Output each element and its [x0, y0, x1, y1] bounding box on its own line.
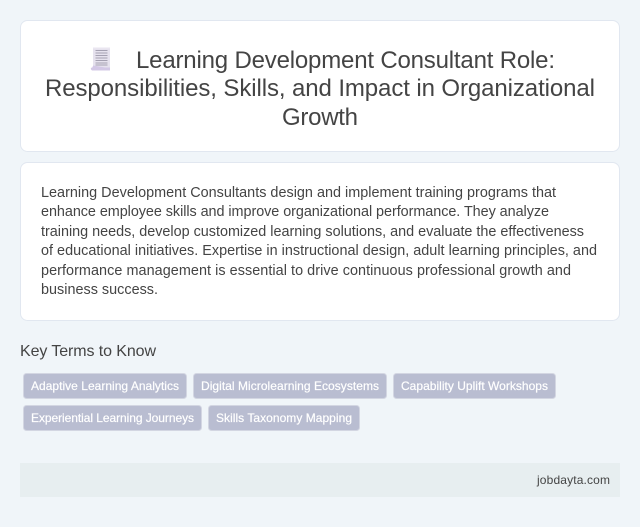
panel: description card [20, 162, 620, 320]
description text: training needs, develop customized learning solutions, and evaluate the effectiveness [41, 224, 584, 240]
chip: adaptive learning analytics: Adaptive Learning Analytics [31, 379, 179, 393]
chip: skills taxonomy mapping: Skills Taxonomy Mapping [216, 411, 352, 425]
panel: title card [20, 20, 620, 152]
description text: Learning Development Consultants design and implement training programs that [41, 185, 556, 201]
icon: receipt scroll [91, 47, 110, 70]
footer bar: jobdayta.com [536, 473, 610, 487]
description text [41, 185, 597, 298]
footer bar [20, 463, 620, 497]
chip: skills taxonomy mapping [208, 406, 360, 430]
title text [45, 47, 595, 131]
chip: capability uplift workshops: Capability Uplift Workshops [401, 379, 548, 393]
chip: experiential learning journeys [24, 406, 202, 430]
heading: key terms: Key Terms to Know [20, 343, 156, 360]
description text: performance management is essential to drive continuous professional growth and [41, 263, 571, 279]
description text: of educational initiatives. Expertise in instructional design, adult learning principles, and [41, 243, 597, 259]
chip: experiential learning journeys: Experiential Learning Journeys [31, 411, 194, 425]
title text: Responsibilities, Skills, and Impact in Organizational [45, 75, 595, 102]
chip: capability uplift workshops [394, 374, 556, 398]
description text: enhance employee skills and improve organizational performance. They analyze [41, 204, 549, 220]
description text: business success. [41, 282, 158, 298]
chip: adaptive learning analytics [24, 374, 186, 398]
title text: Growth [282, 104, 358, 131]
chip: digital microlearning ecosystems: Digital Microlearning Ecosystems [201, 379, 379, 393]
title text: Learning Development Consultant Role: [136, 47, 555, 74]
chip: digital microlearning ecosystems [194, 374, 386, 398]
